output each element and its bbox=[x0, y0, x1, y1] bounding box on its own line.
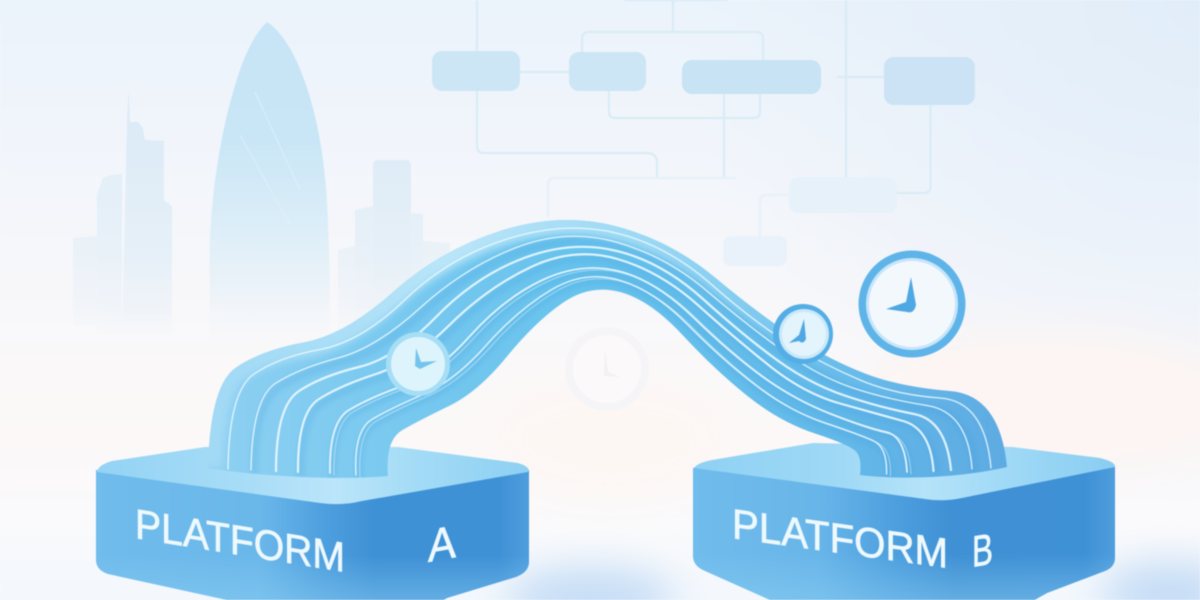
clock on ribbon left bbox=[386, 332, 450, 396]
platform B letter: B bbox=[972, 525, 993, 577]
flowchart box 4 bbox=[884, 57, 975, 105]
platform A letter: A bbox=[428, 515, 456, 572]
platform B body bbox=[693, 466, 1115, 600]
ghost clock bbox=[569, 331, 645, 407]
ribbon highlights and strands bbox=[208, 220, 1007, 479]
skyline: right towers bbox=[338, 160, 450, 335]
flowing data ribbon bbox=[208, 220, 1007, 479]
platform A bbox=[96, 447, 529, 600]
platform A label: PLATFORM bbox=[135, 500, 345, 581]
flowchart box 6 bbox=[723, 236, 787, 266]
platform B label: PLATFORM bbox=[732, 500, 948, 577]
platform B bbox=[693, 443, 1115, 600]
skyline: left towers bbox=[73, 88, 172, 335]
flowchart box 2 bbox=[569, 52, 646, 91]
floating clock bbox=[858, 250, 966, 358]
platform A top surface bbox=[97, 447, 529, 504]
platform A body bbox=[96, 470, 529, 600]
clock on ribbon right bbox=[773, 304, 833, 364]
flowchart connectors bbox=[477, 0, 930, 236]
flowchart top box bbox=[623, 0, 729, 1]
flowchart box 1 bbox=[432, 51, 520, 91]
ribbon body bbox=[208, 220, 1007, 478]
flowchart box 3 bbox=[682, 60, 821, 94]
skyline: gherkin tower bbox=[210, 22, 330, 350]
platform B top surface bbox=[694, 443, 1115, 500]
flowchart box 5 bbox=[789, 177, 897, 213]
flowchart background diagram bbox=[432, 0, 975, 266]
